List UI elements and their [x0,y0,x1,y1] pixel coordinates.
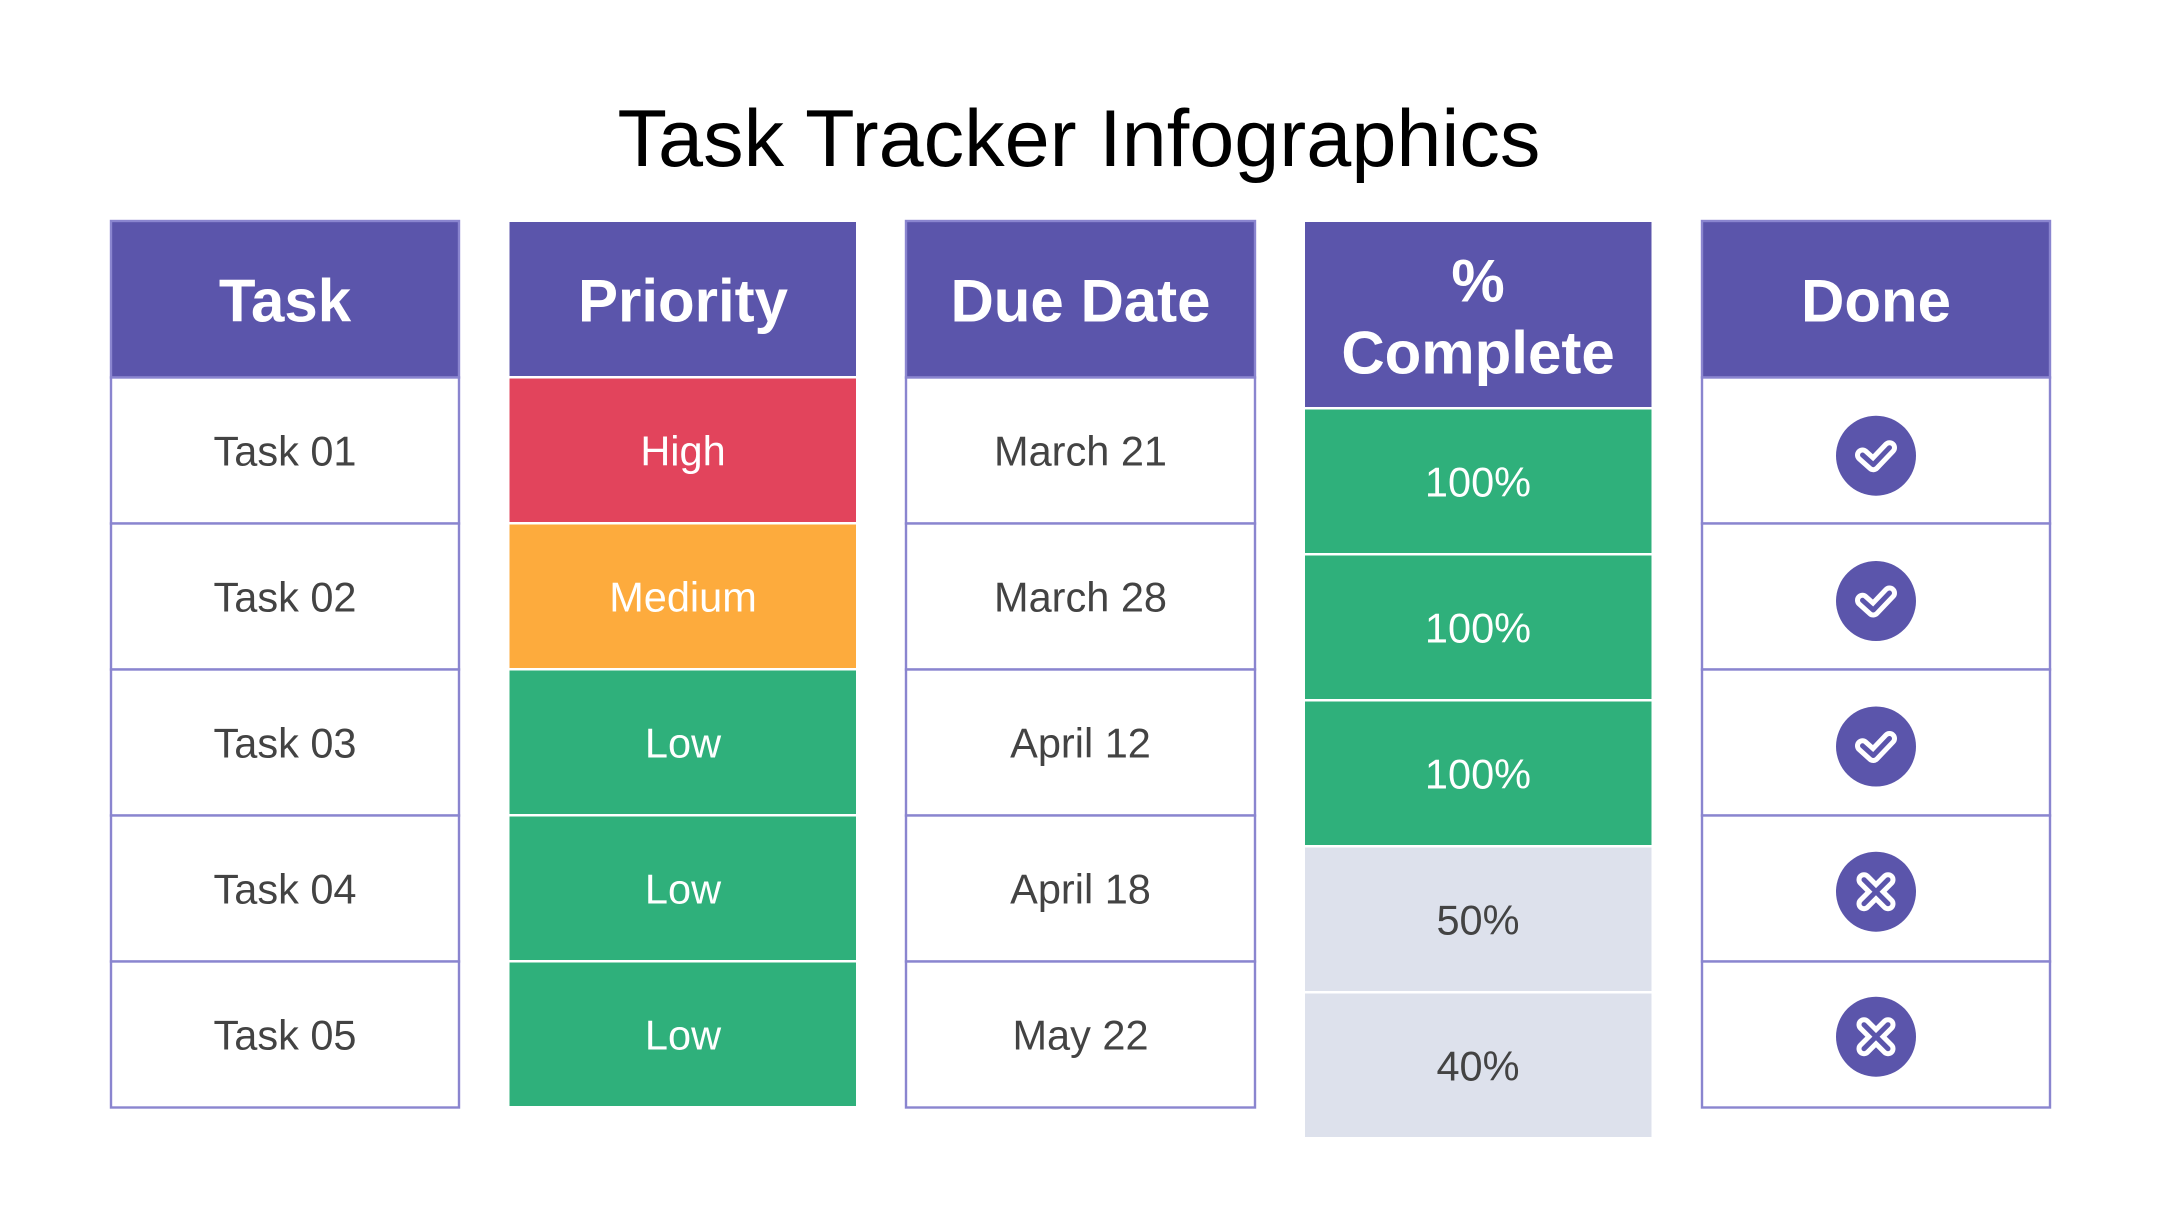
priority: high [510,378,856,522]
row: task 05: Task 05 [213,1012,357,1059]
priority: low [510,816,856,960]
percent: 40 [1305,994,1652,1137]
header: task [111,221,459,378]
priority: low [510,962,856,1106]
percent: 100 [1305,556,1652,699]
priority: medium: Medium [609,574,757,621]
icon: cross [1836,852,1916,932]
priority: low [510,670,856,814]
row: task 04 [111,816,459,962]
icon: check [1836,416,1916,496]
panel: task column [111,221,459,1108]
panel: priority column [510,222,856,1106]
row: task 03: Task 03 [213,720,357,767]
row: task 03 [111,670,459,816]
row: april 18: April 18 [1010,866,1151,913]
header: done: Done [1801,268,1951,335]
icon: check [1836,706,1916,786]
header: priority: Priority [578,268,789,335]
row: april 12: April 12 [1010,720,1151,767]
percent: 100 [1305,410,1652,553]
panel: percent complete column [1305,222,1652,1137]
row: march 21: March 21 [994,428,1167,475]
header: task: Task [219,268,352,335]
row: april 12 [906,670,1255,816]
percent: 100: 100% [1425,605,1531,652]
row: march 28: March 28 [994,574,1167,621]
header: done [1702,221,2050,378]
percent: 50: 50% [1436,897,1520,944]
percent: 50 [1305,848,1652,991]
header: percent complete: % [1451,248,1505,315]
row: may 22: May 22 [1012,1012,1149,1059]
priority: medium [510,524,856,668]
row: task 01 [111,378,459,524]
row: march 21 [906,378,1255,524]
header: due date [906,221,1255,378]
priority: low: Low [645,866,722,913]
row: done 3 [1702,670,2050,816]
percent: 100 [1305,702,1652,845]
panel: done column [1702,221,2050,1108]
row: task 02 [111,524,459,670]
percent: 100: 100% [1425,751,1531,798]
row: task 01: Task 01 [213,428,357,475]
percent: 40: 40% [1436,1043,1520,1090]
row: done 1 [1702,378,2050,524]
header: percent complete: Complete [1341,320,1615,386]
header: priority [510,222,856,376]
row: may 22 [906,962,1255,1108]
row: task 04: Task 04 [213,866,357,913]
row: done 5 [1702,962,2050,1108]
row: april 18 [906,816,1255,962]
priority: low: Low [645,1012,722,1059]
row: task 02: Task 02 [213,574,357,621]
row: done 2 [1702,524,2050,670]
row: task 05 [111,962,459,1108]
header: percent complete [1305,222,1652,407]
header: due date: Due Date [950,268,1211,335]
panel: due date column [906,221,1255,1108]
percent: 100: 100% [1425,459,1531,506]
row: march 28 [906,524,1255,670]
row: done 4 [1702,816,2050,962]
icon: check [1836,561,1916,641]
icon: cross [1836,997,1916,1077]
priority: high: High [640,428,726,475]
title: Task Tracker Infographics [618,94,1540,184]
priority: low: Low [645,720,722,767]
